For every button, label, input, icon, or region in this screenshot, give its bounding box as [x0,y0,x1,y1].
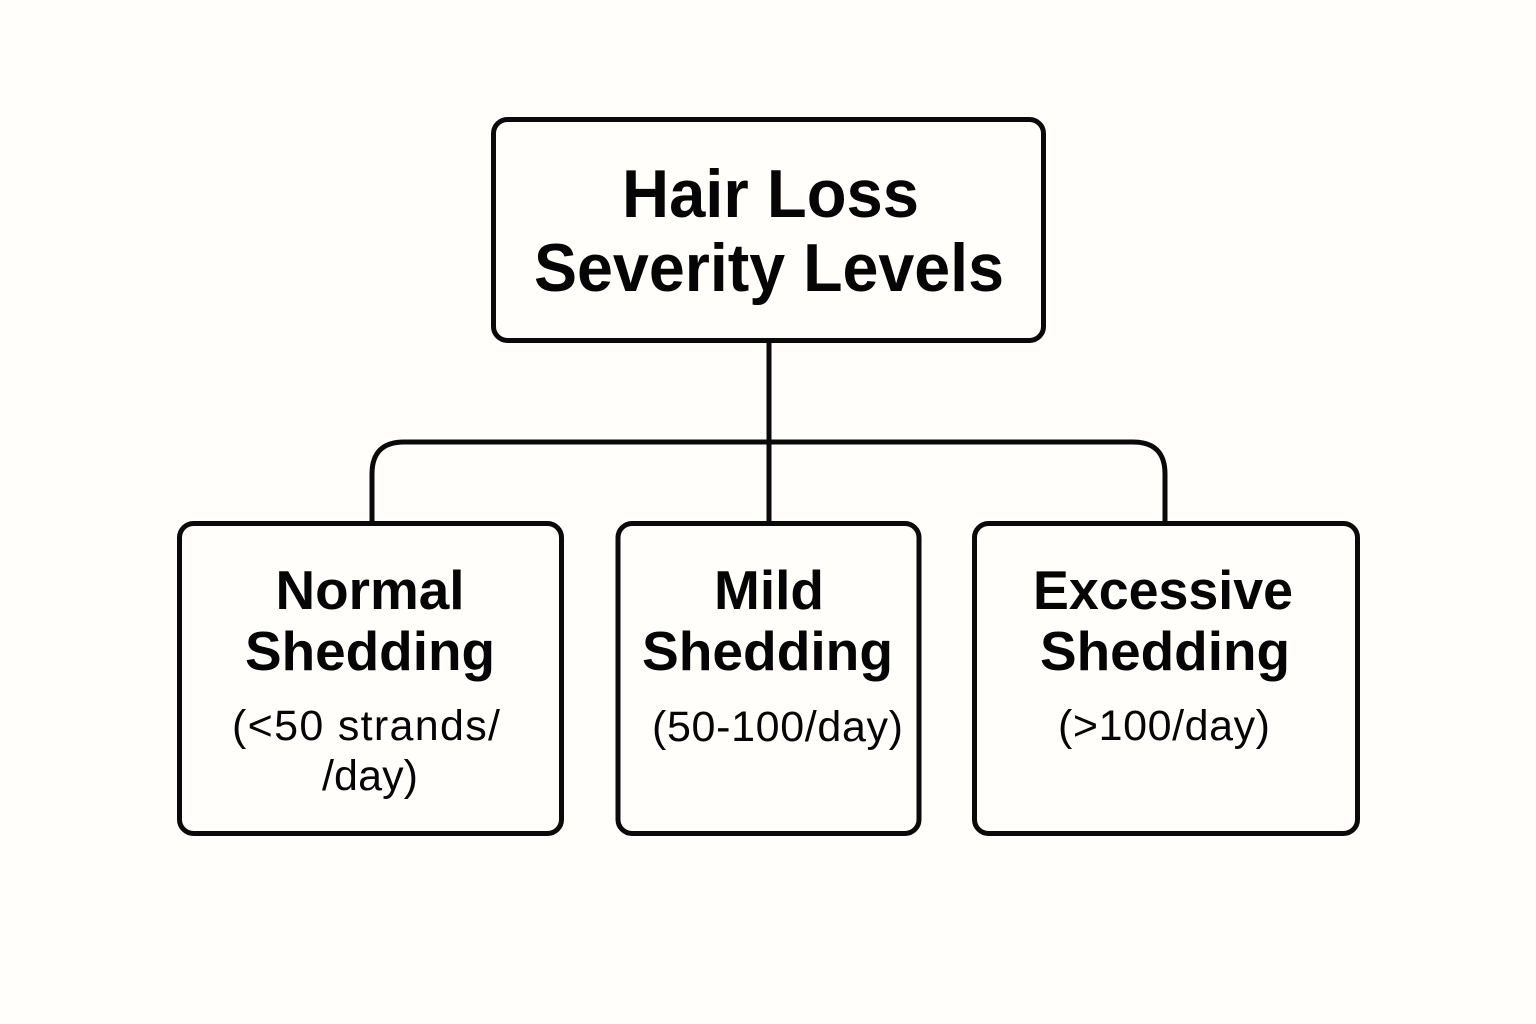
text: mild range: (50-100/day) [652,703,903,751]
text: normal range [232,702,500,800]
heading: normal shedding: Shedding [245,620,495,682]
heading: normal shedding [245,559,495,682]
heading: Hair Loss Severity Levels [534,156,1004,306]
heading: excessive shedding: Shedding [1040,620,1290,682]
heading: mild shedding [642,559,893,682]
heading: excessive shedding: Excessive [1033,559,1293,621]
heading: Hair Loss Severity Levels: Severity Levels [534,230,1004,306]
heading: mild shedding: Mild [714,559,824,621]
heading: mild shedding: Shedding [642,620,893,682]
heading: normal shedding: Normal [276,559,464,621]
connector lines [372,341,1165,522]
text: excessive range: (>100/day) [1058,702,1270,750]
text: normal range: /day) [322,752,418,800]
heading: Hair Loss Severity Levels: Hair Loss [622,156,919,232]
panel: excessive shedding [974,524,1358,834]
text: normal range: (<50 strands/ [232,702,500,750]
panel: root title [494,120,1044,340]
heading: excessive shedding [1033,559,1293,682]
panel: mild shedding [618,524,919,834]
panel: normal shedding [180,524,562,834]
